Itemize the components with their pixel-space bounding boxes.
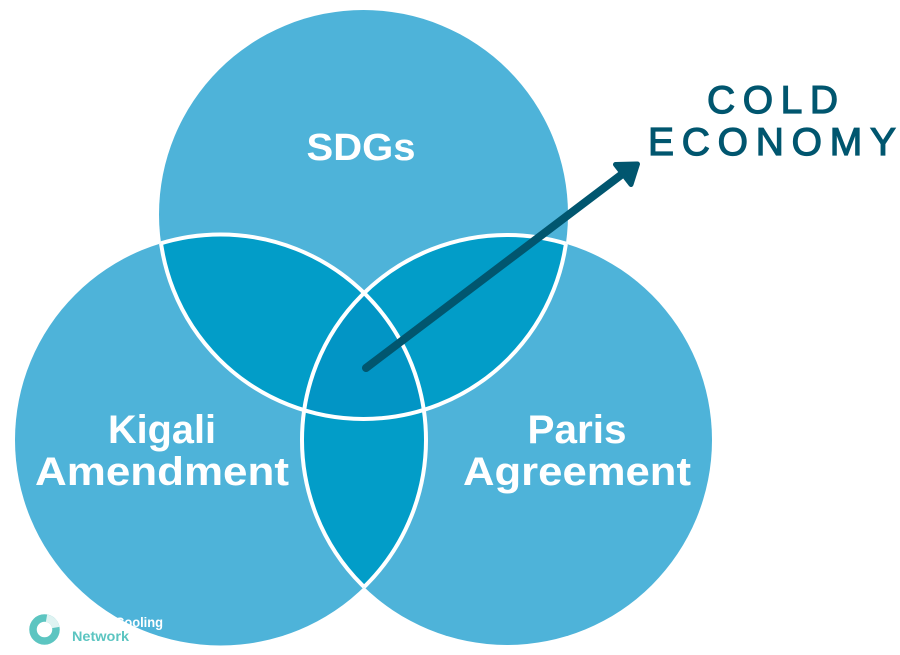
heading: cold economy <box>648 79 896 164</box>
logo: Global Cooling Network <box>33 614 163 644</box>
label: SDGs: SDGs <box>306 127 416 169</box>
label: Kigali Amendment <box>35 408 289 494</box>
arrow to cold economy <box>366 164 638 368</box>
overlap outline: Paris arc <box>300 233 566 588</box>
label: Kigali Amendment: Amendment <box>35 450 289 494</box>
icon: swirl ring <box>33 618 56 641</box>
overlap outline: Kigali arc <box>160 232 428 588</box>
heading: cold economy: ECONOMY <box>648 121 896 164</box>
overlap: Kigali Amendment and Paris Agreement <box>304 412 424 584</box>
circle: Kigali Amendment <box>15 234 426 646</box>
label: Paris Agreement: Agreement <box>463 450 691 494</box>
logo text: Network <box>72 628 129 644</box>
overlap outline: SDGs arc <box>159 243 568 421</box>
logo text <box>72 614 163 644</box>
circle: Paris Agreement <box>302 235 712 645</box>
venn diagram <box>15 10 712 646</box>
circle: SDGs <box>159 10 568 419</box>
label: Paris Agreement <box>463 408 691 494</box>
overlap: SDGs and Kigali Amendment <box>163 236 361 408</box>
overlap: centre of all three <box>302 235 712 645</box>
logo text: Cooling <box>115 614 163 630</box>
label: Kigali Amendment: Kigali <box>108 408 216 452</box>
overlap: SDGs and Paris Agreement <box>367 237 564 408</box>
heading: cold economy: COLD <box>707 79 838 122</box>
label: Paris Agreement: Paris <box>528 408 626 452</box>
logo text: Global <box>72 614 116 630</box>
